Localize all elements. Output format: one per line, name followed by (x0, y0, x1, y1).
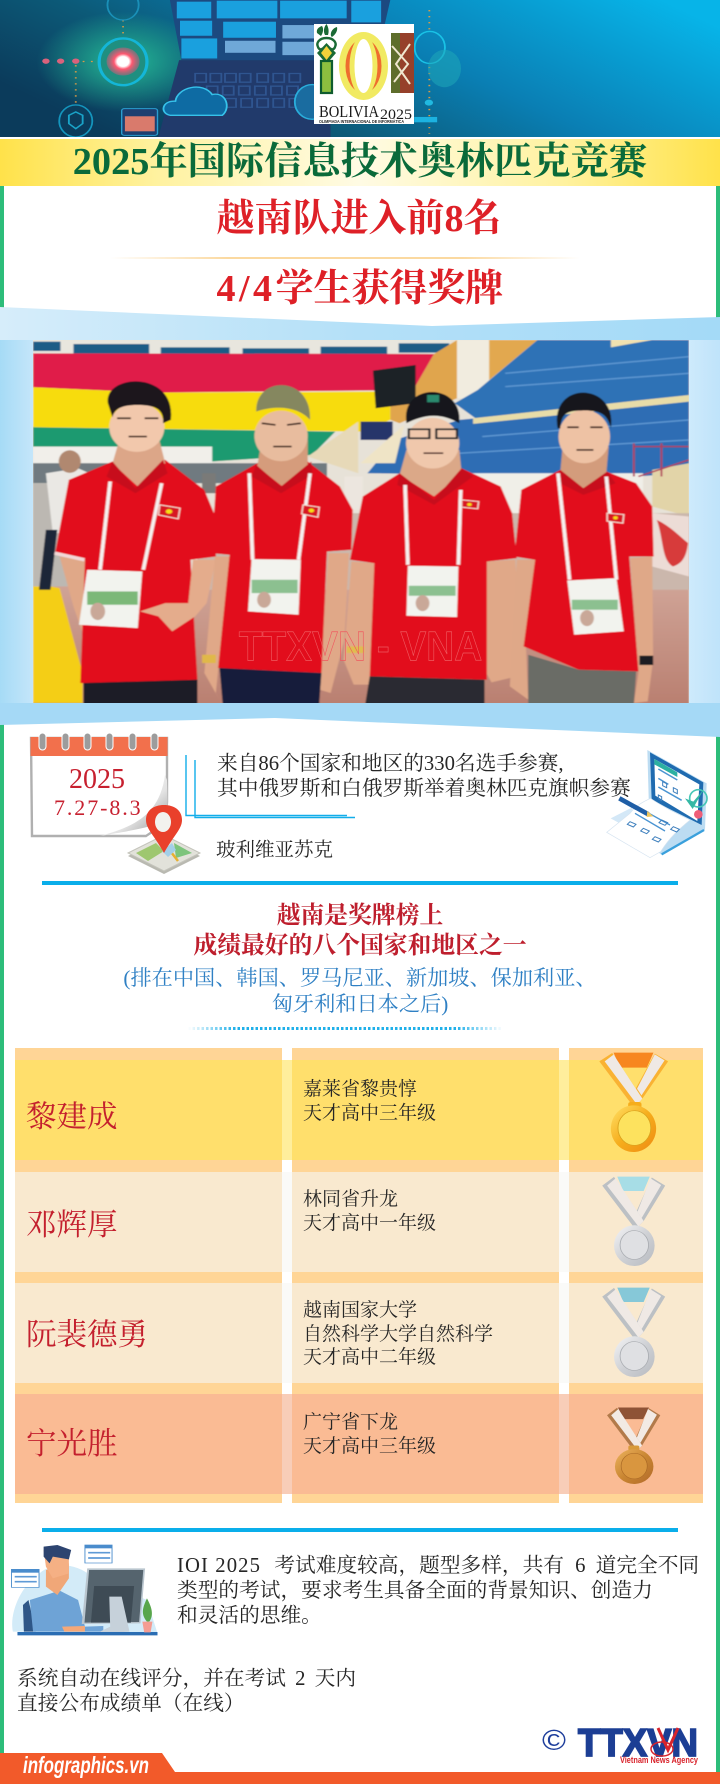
icon: gold medal (600, 1052, 668, 1152)
TTXVN logo (542, 1724, 699, 1766)
subtitle: top 8: 越南队进入前8名 (216, 198, 502, 240)
row 4 band (15, 1394, 703, 1494)
team photo (33, 340, 689, 703)
icon: silver medal (602, 1176, 666, 1266)
light blue frame behind photo (0, 307, 720, 737)
copyright mark: © (542, 1725, 566, 1757)
row 1 band (15, 1060, 703, 1160)
dotted divider (188, 1027, 503, 1030)
school: row 1: 嘉莱省黎贵惇 (303, 1079, 417, 1100)
participants text (217, 752, 631, 800)
IOI Bolivia 2025 logo (314, 24, 414, 124)
medal table (15, 1048, 703, 1503)
school: row 2: 林同省升龙 (303, 1189, 398, 1210)
school: row 2: 天才高中一年级 (303, 1212, 436, 1234)
ranking heading: 成绩最好的八个国家和地区之一 (193, 933, 527, 959)
exam description text: 类型的考试，要求考生具备全面的背景知识、创造力 (177, 1580, 653, 1602)
participants text: 来自86个国家和地区的330名选手参赛, (217, 753, 564, 775)
person 4 (510, 560, 535, 700)
school: row 3: 越南国家大学 (303, 1300, 417, 1321)
ranking heading: 越南是奖牌榜上 (277, 903, 443, 929)
row 2 band (15, 1172, 703, 1272)
section rule (42, 1528, 678, 1532)
name: row 2: 邓辉厚 (26, 1208, 118, 1242)
exam description text: IOI 2025 考试难度较高，题型多样，共有 6 道完全不同 (177, 1555, 699, 1577)
footer bar (0, 1752, 720, 1784)
table columns (15, 1048, 703, 1503)
logo wordmark: BOLIVIA (319, 102, 380, 121)
grading text: 直接公布成绩单（在线） (17, 1693, 245, 1715)
person 1 (60, 556, 112, 643)
main title: 2025年国际信息技术奥林匹克竞赛 (73, 141, 647, 183)
photo watermark: TTXVN - VNA (239, 623, 482, 670)
logo tagline: OLIMPIADA INTERNACIONAL DE INFORMÁTICA (319, 119, 404, 124)
grading text (17, 1668, 356, 1715)
school: row 2 (303, 1188, 436, 1234)
bracket lines (185, 755, 355, 818)
school: row 4: 广宁省下龙 (303, 1412, 398, 1433)
school: row 1: 天才高中三年级 (303, 1102, 436, 1124)
name: row 1: 黎建成 (26, 1100, 118, 1134)
calendar dates: 7.27-8.3 (54, 795, 143, 820)
school: row 4: 天才高中三年级 (303, 1436, 436, 1456)
person 3 (344, 561, 374, 685)
subtitle: medals: 4/4学生获得奖牌 (216, 268, 504, 310)
logo year: 2025 (380, 107, 412, 123)
icon: person at computer (11, 1544, 158, 1636)
icon: bronze medal (607, 1408, 660, 1484)
icon: calendar (30, 734, 168, 838)
O glyph (339, 32, 388, 100)
icon: location pin on map (127, 805, 201, 874)
ranking countries: 匈牙利和日本之后) (272, 992, 448, 1016)
grading text: 系统自动在线评分，并在考试 2 天内 (17, 1668, 356, 1690)
person 2 (204, 556, 230, 701)
left green border (0, 186, 4, 1756)
exam description text (177, 1554, 699, 1627)
website label: infographics.vn (23, 1752, 149, 1778)
ranking countries: (排在中国、韩国、罗马尼亚、新加坡、保加利亚、 (123, 966, 597, 990)
ranking countries (123, 966, 597, 1016)
right I glyph (391, 33, 414, 93)
right green border (716, 186, 720, 1776)
title band (0, 139, 720, 186)
name: row 3: 阮裴德勇 (26, 1318, 148, 1352)
school: row 3: 天才高中二年级 (303, 1347, 436, 1368)
school: row 3: 自然科学大学自然科学 (303, 1324, 493, 1344)
school: row 1 (303, 1078, 436, 1124)
icon: silver medal (602, 1288, 666, 1377)
calendar year: 2025 (69, 764, 125, 795)
ranking heading (193, 902, 527, 959)
row 3 band (15, 1283, 703, 1383)
background people (46, 468, 90, 533)
location text: 玻利维亚苏克 (216, 840, 333, 861)
exam description text: 和灵活的思维。 (177, 1605, 322, 1627)
left I glyph (317, 24, 337, 93)
section rule (42, 881, 678, 885)
divider under subtitle (110, 257, 580, 259)
participants text: 其中俄罗斯和白俄罗斯举着奥林匹克旗帜参赛 (217, 778, 631, 800)
icon: exam paper on tablet (606, 750, 708, 858)
school: row 4 (303, 1412, 436, 1456)
header banner: technology illustration (0, 0, 720, 137)
school: row 3 (303, 1300, 493, 1368)
name: row 4: 宁光胜 (26, 1427, 118, 1461)
